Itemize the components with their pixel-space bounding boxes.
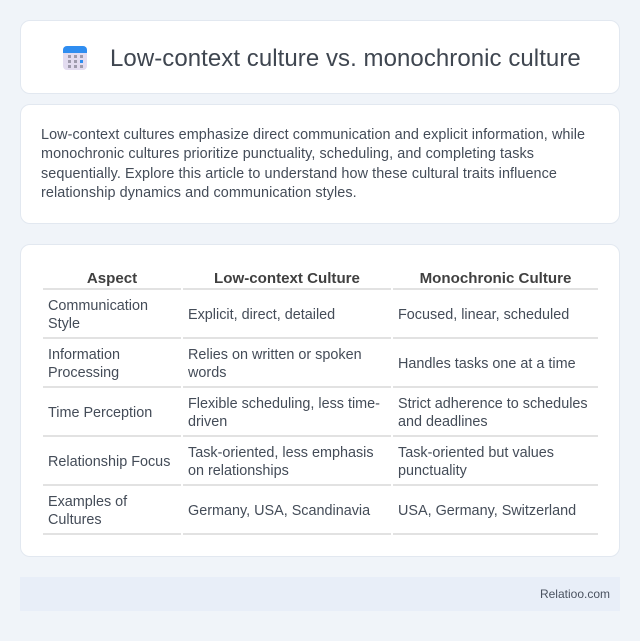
row: relationship focus: Task-oriented, less emphasis [188,445,374,461]
panel: title card [20,20,620,94]
table header: Aspect [87,270,137,287]
row: communication style: Style [48,316,80,332]
row: relationship focus [48,445,554,479]
intro text: sequentially. Explore this article to understand how these cultural traits influence [41,166,557,182]
row: relationship focus: punctuality [398,463,467,479]
panel: intro card [20,104,620,224]
table header [87,270,571,287]
row: communication style: Focused, linear, scheduled [398,307,569,323]
row: examples of cultures [48,494,576,528]
row: examples of cultures: Germany, USA, Scandinavia [188,503,370,519]
title: Low-context culture vs. monochronic culture [110,45,581,72]
icon: calendar [63,46,87,70]
intro text: relationship dynamics and communication styles. [41,185,357,201]
row: communication style: Communication [48,298,148,314]
row: time perception [48,396,588,430]
intro text [41,127,585,201]
row: time perception: Strict adherence to schedules [398,396,588,412]
row: communication style [48,298,569,332]
row: information processing [48,347,576,381]
footer text: Relatioo.com [540,587,610,601]
row: time perception: Flexible scheduling, less time- [188,396,380,412]
row: information processing: Information [48,347,120,363]
table header: Low-context Culture [214,270,360,287]
row: information processing: Relies on written or spoken [188,347,362,363]
row: relationship focus: Relationship Focus [48,454,170,470]
row: examples of cultures: Cultures [48,512,102,528]
row: examples of cultures: USA, Germany, Switzerland [398,503,576,519]
intro text: monochronic cultures prioritize punctuality, scheduling, and completing tasks [41,146,534,162]
row: information processing: Handles tasks one at a time [398,356,576,372]
row: relationship focus: Task-oriented but values [398,445,554,461]
row: information processing: Processing [48,365,119,381]
row: relationship focus: on relationships [188,463,289,479]
comparison table [43,270,598,535]
panel: comparison table card [20,244,620,557]
row: time perception: Time Perception [48,405,152,421]
intro text: Low-context cultures emphasize direct communication and explicit information, while [41,127,585,143]
row: time perception: driven [188,414,227,430]
row: examples of cultures: Examples of [48,494,127,510]
row: time perception: and deadlines [398,414,488,430]
table header: Monochronic Culture [420,270,571,287]
row: communication style: Explicit, direct, detailed [188,307,335,323]
row: information processing: words [188,365,226,381]
footer bar [20,577,620,611]
